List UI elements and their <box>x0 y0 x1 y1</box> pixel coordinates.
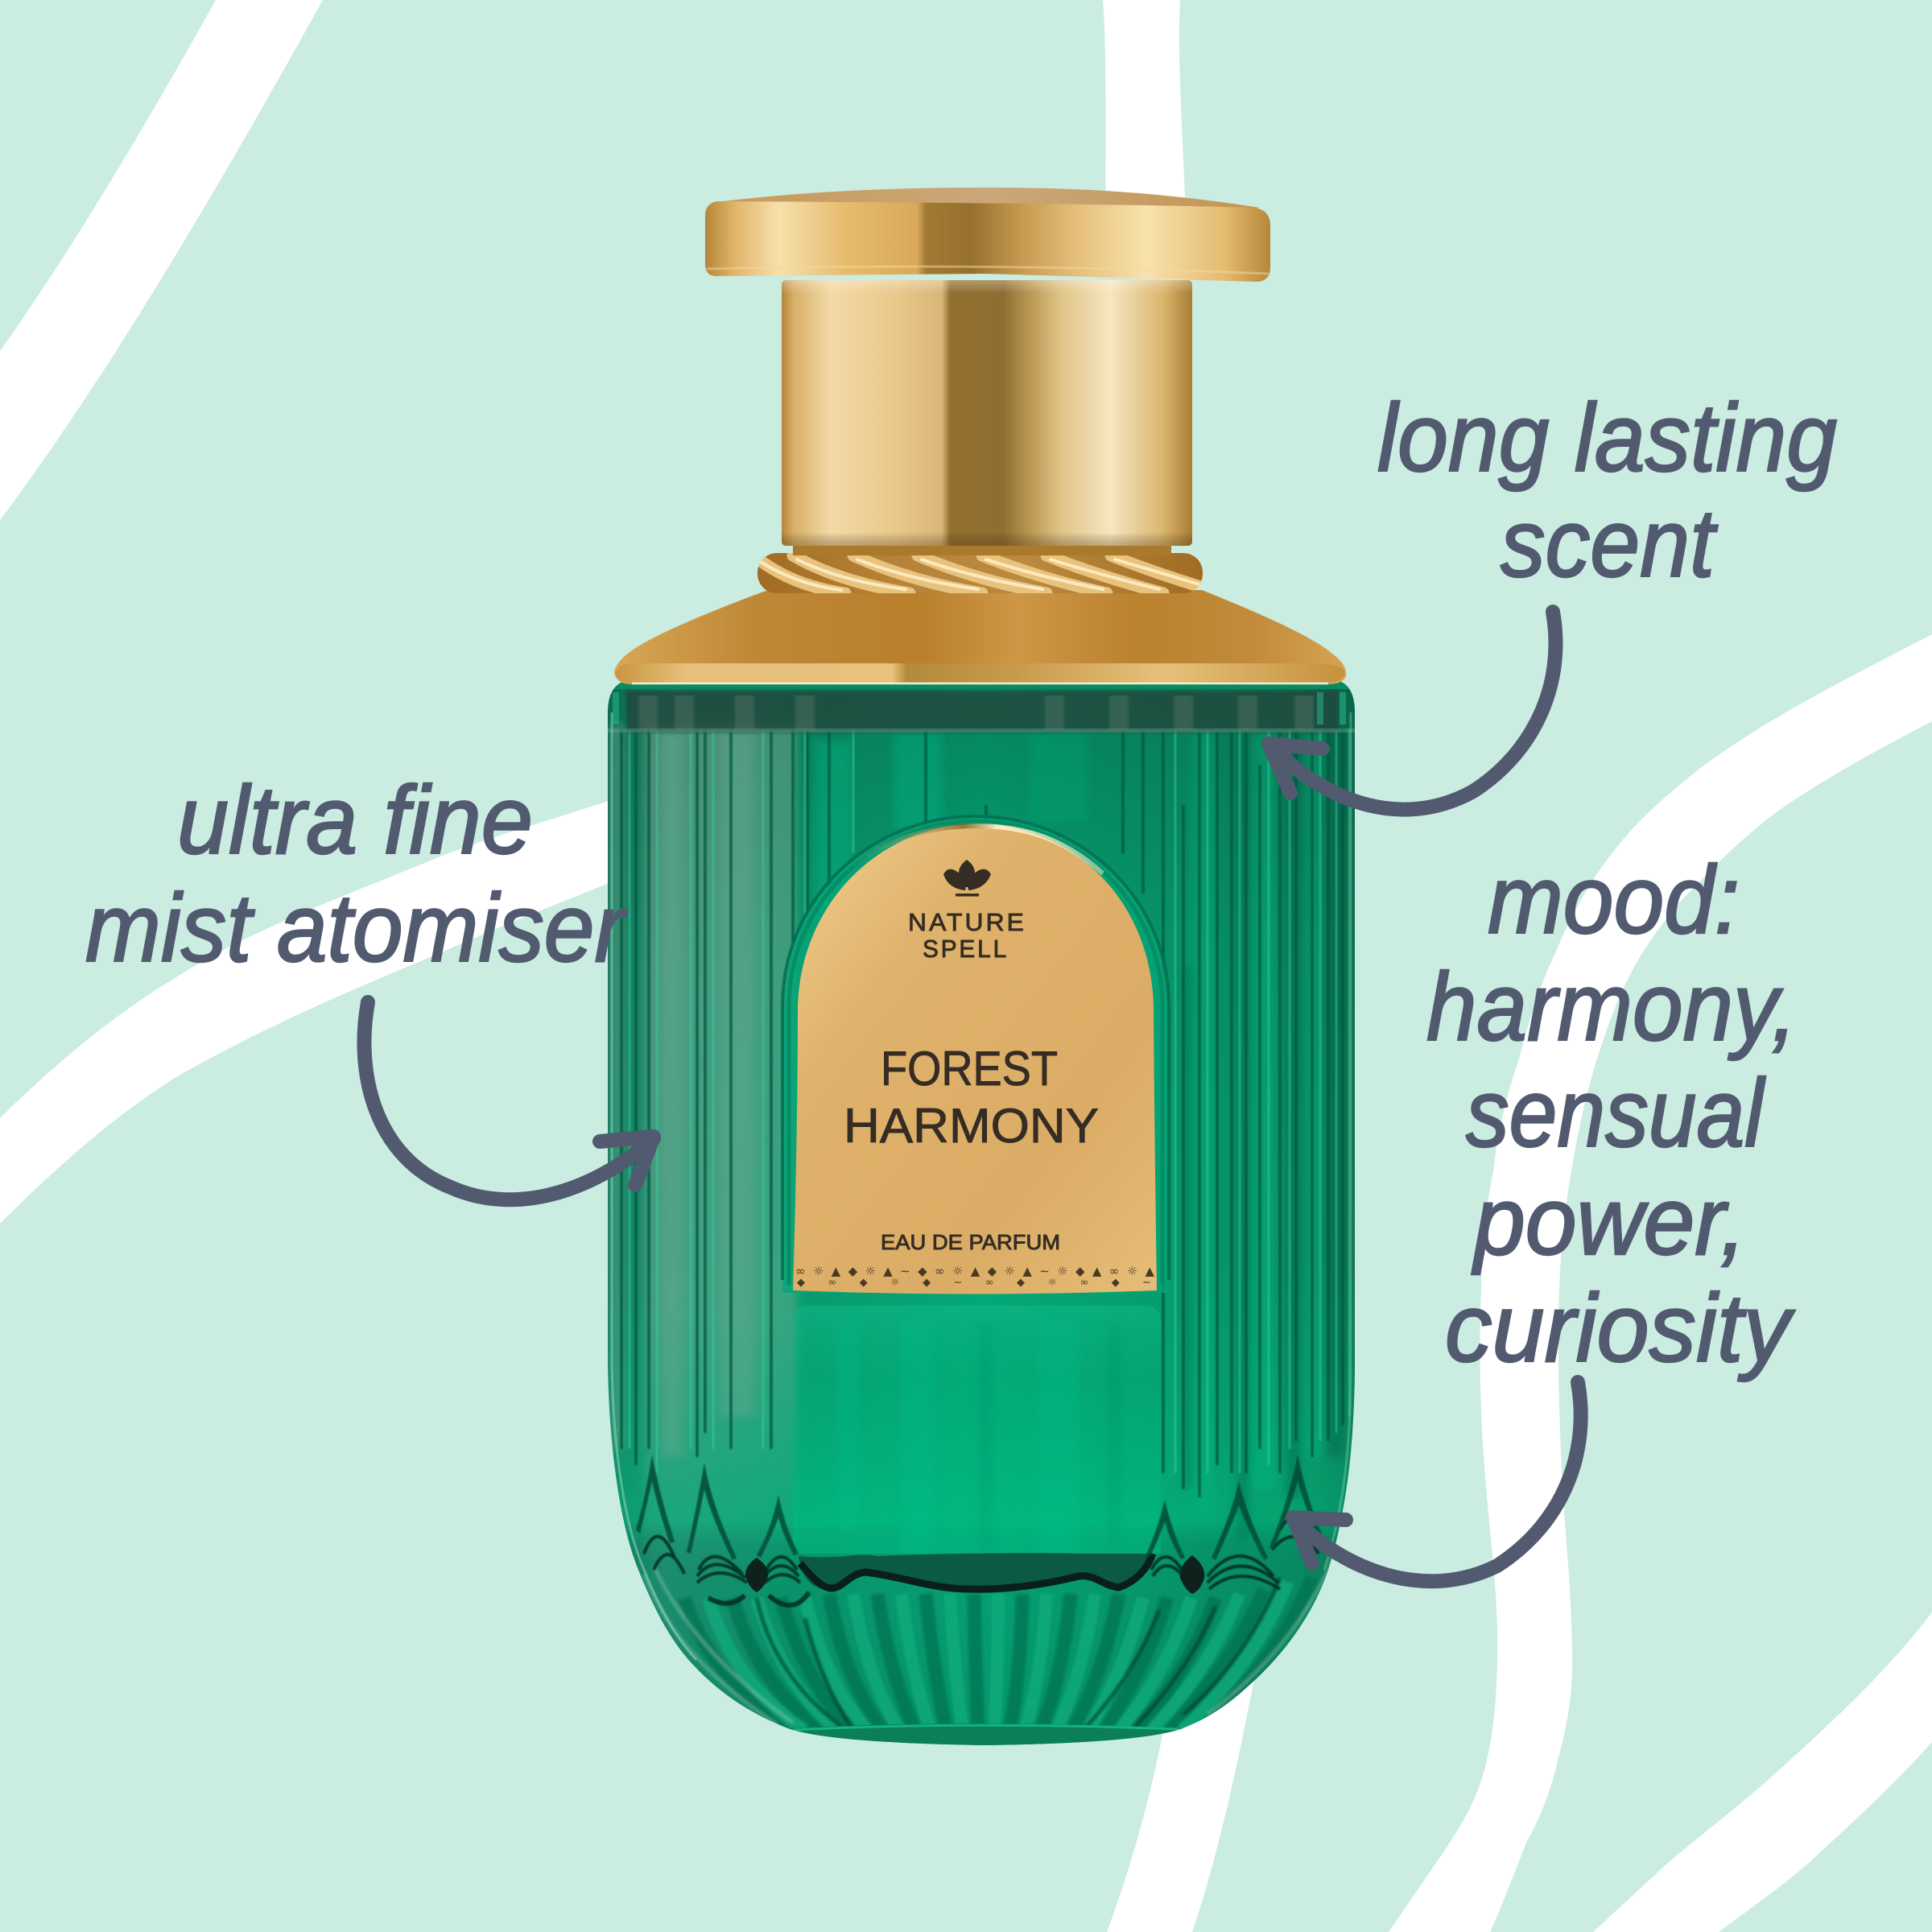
soft vertical bands <box>662 733 1344 1554</box>
arrow: to mood <box>1293 1382 1581 1581</box>
gold neck collar <box>782 280 1192 555</box>
callout: mood: mood: <box>1488 846 1740 954</box>
product name <box>844 1042 1099 1153</box>
gold shoulder <box>614 590 1346 684</box>
callout: mood: harmony, <box>1426 953 1797 1061</box>
base rim <box>788 1724 1183 1747</box>
top dark band <box>608 681 1356 733</box>
eau de parfum: EAU DE PARFUM <box>881 1230 1060 1254</box>
ornament row <box>795 1264 1154 1289</box>
ornament row: ◆ ∞ ◆ ☼ ◆ ∼ ∞ ◆ ☼ ∞ ◆ ∼ <box>797 1277 1151 1289</box>
callout: long lasting scent: long lasting <box>1377 384 1837 492</box>
edge highlights <box>612 712 696 1660</box>
fine glass ribs <box>621 729 1349 1497</box>
callout: mood: power, <box>1472 1167 1746 1275</box>
callout: mood: sensual <box>1466 1059 1766 1167</box>
lower recess panel <box>793 1306 1161 1554</box>
label recess <box>782 815 1169 1293</box>
product name: HARMONY <box>844 1099 1099 1153</box>
callout: ultra fine mist atomiser: ultra fine <box>177 766 533 874</box>
refraction nodes <box>745 1555 1204 1594</box>
glass body <box>604 676 1360 1747</box>
dark refraction band <box>799 1553 1153 1590</box>
fan ribs under the band <box>644 1530 1343 1731</box>
callout: ultra fine mist atomiser: mist atomiser <box>85 874 628 982</box>
brand name: NATURE <box>908 908 1026 936</box>
callout: long lasting scent: scent <box>1501 489 1718 597</box>
left reflection <box>610 724 797 1570</box>
brand name: SPELL <box>923 935 1009 963</box>
brand leaf logo <box>943 860 991 897</box>
callout: long lasting scent <box>1377 384 1837 597</box>
callout: mood: curiosity <box>1445 1274 1796 1382</box>
gold cap <box>705 188 1270 282</box>
callout: ultra fine mist atomiser <box>85 766 628 982</box>
perfume bottle <box>604 188 1360 1747</box>
arrow: to atomiser <box>364 1002 654 1199</box>
chevron refractions <box>644 1517 1319 1605</box>
arrow: to long lasting glass <box>1269 612 1555 810</box>
ornament row: ∞ ☼ ▲ ◆ ☼ ▲ ∼ ◆ ∞ ☼ ▲ ◆ ☼ ▲ ∼ ☼ ◆ ▲ ∞ ☼ ▲ <box>795 1264 1154 1278</box>
product name: FOREST <box>881 1042 1058 1096</box>
tall refraction peaks <box>636 1455 1328 1560</box>
twisted rope ring <box>757 553 1203 593</box>
callout: mood <box>1426 846 1797 1382</box>
gold label <box>793 824 1157 1294</box>
brand name <box>908 908 1026 963</box>
